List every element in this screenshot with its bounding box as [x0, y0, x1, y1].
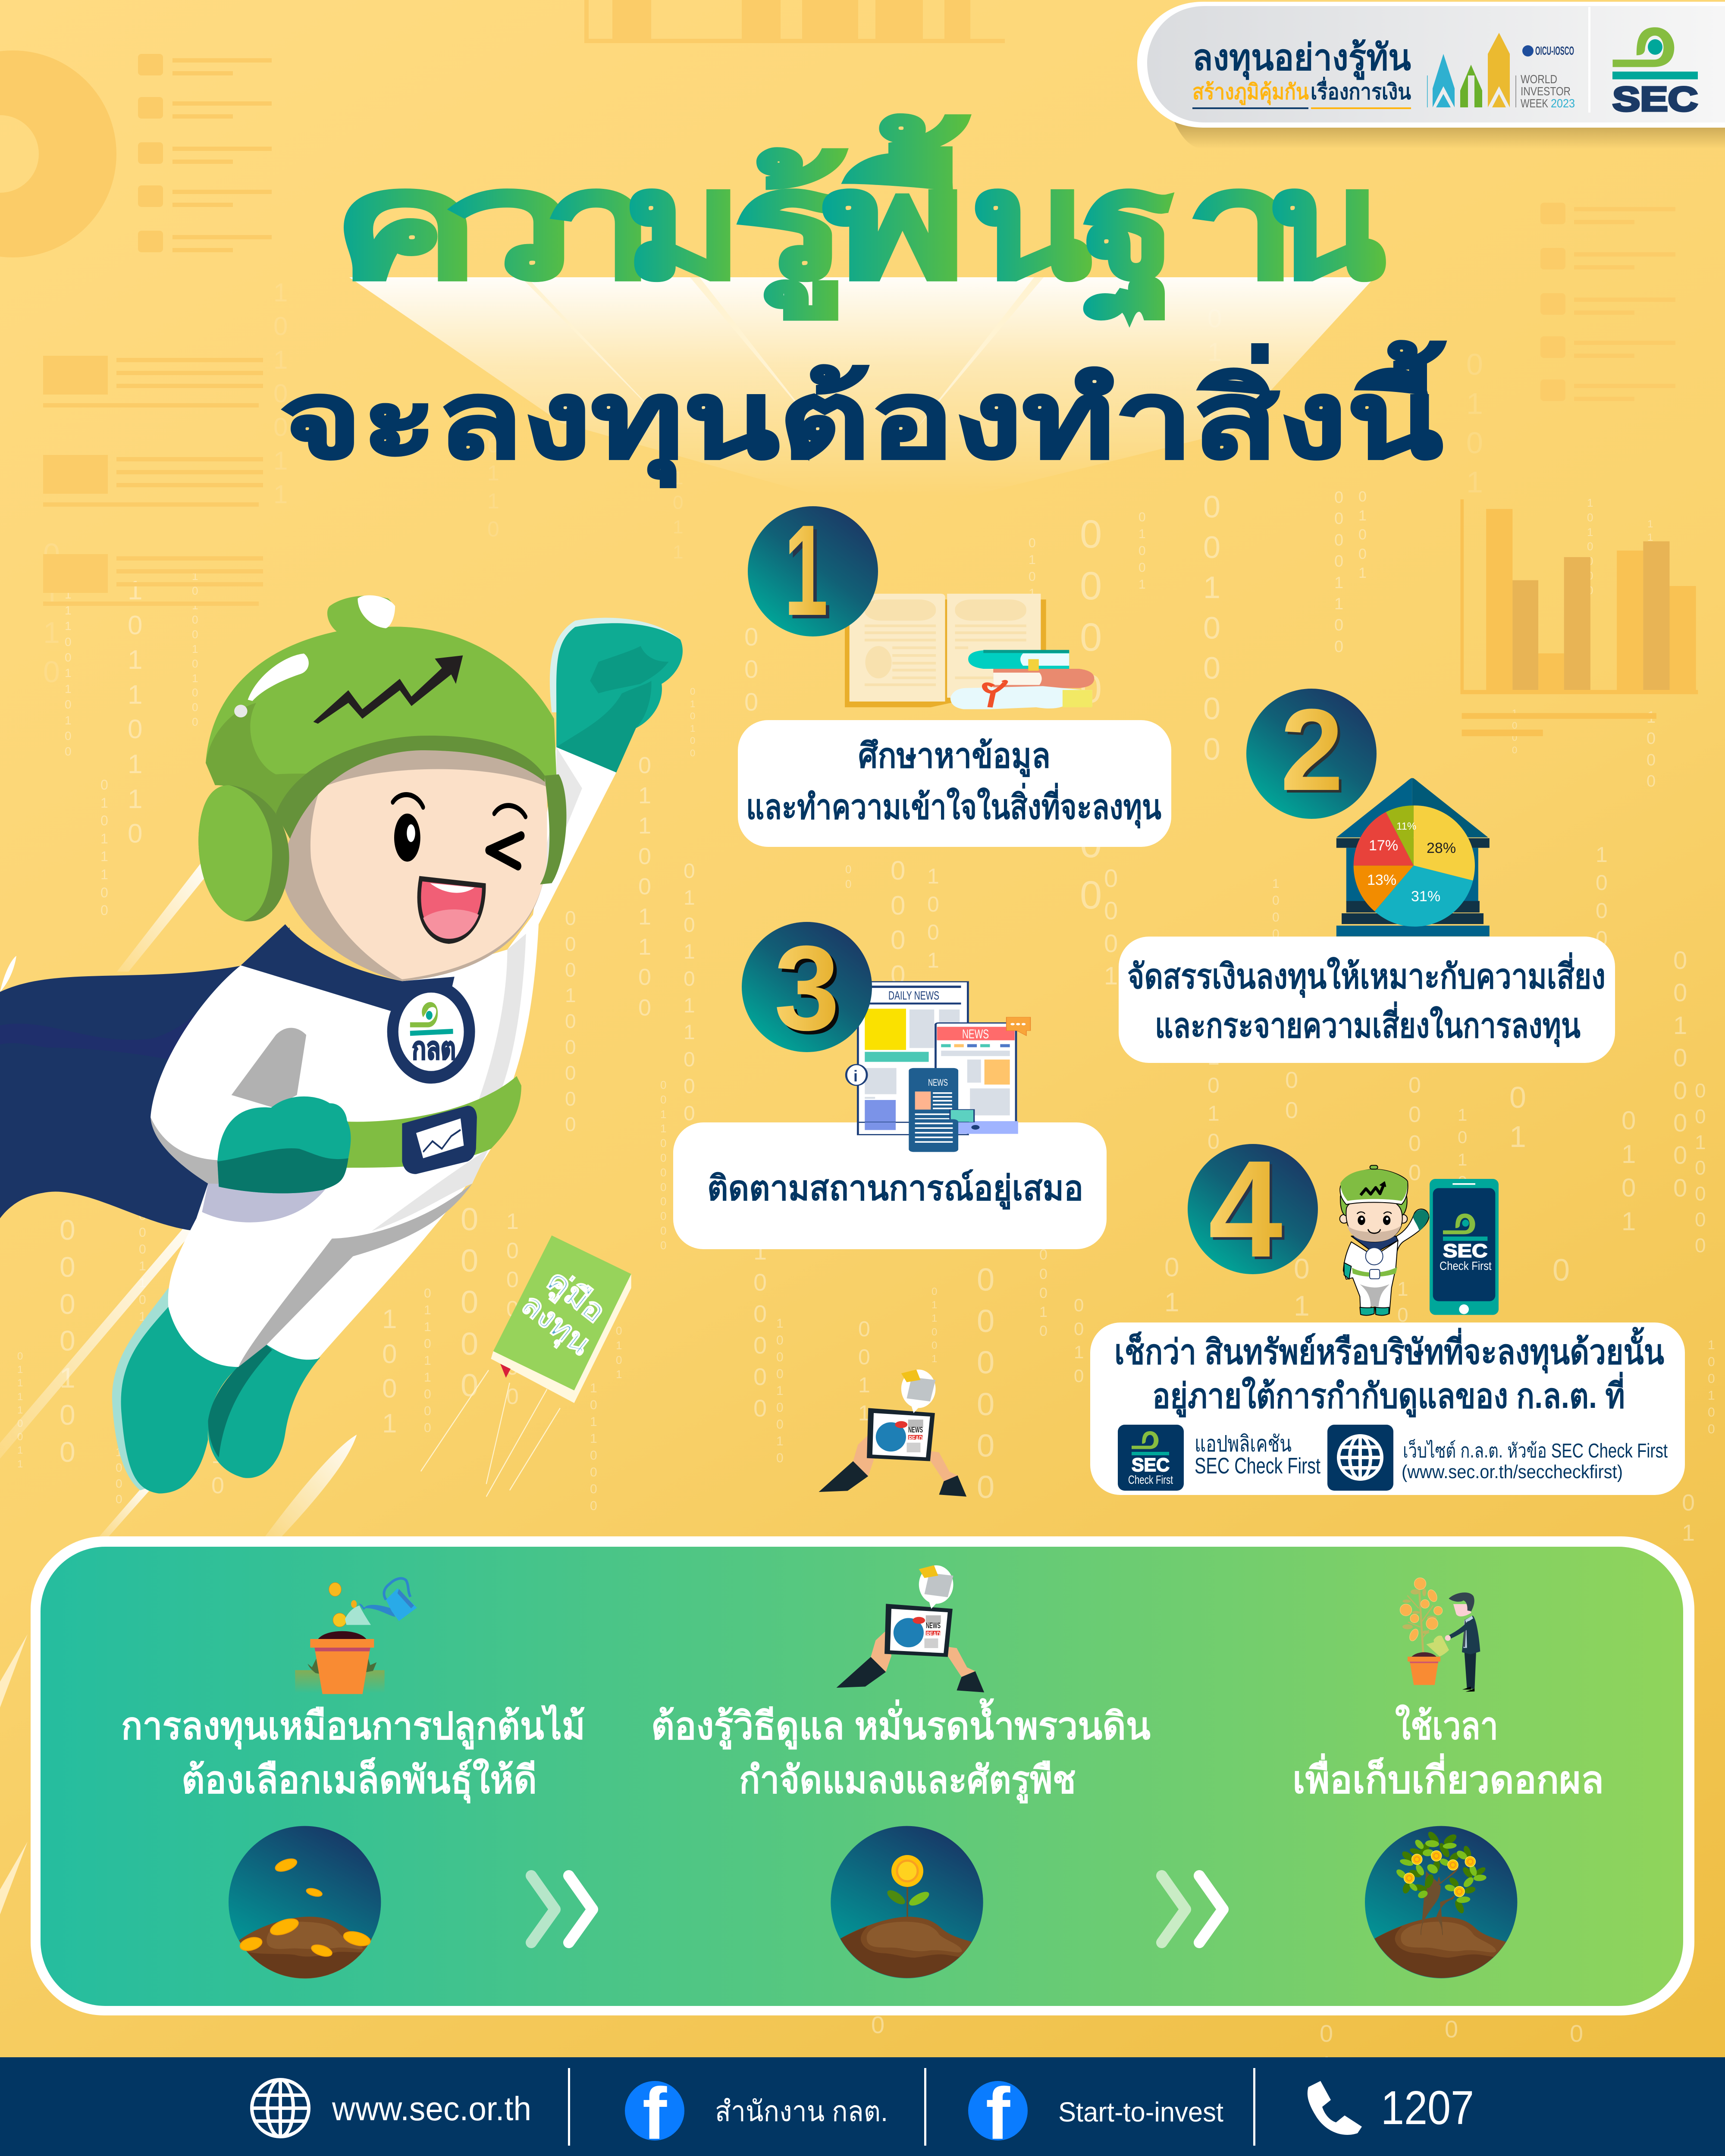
icon: tablet with hands: READ [926, 1631, 940, 1638]
mini mascot [1340, 1166, 1429, 1315]
chest badge [387, 980, 475, 1084]
manual book icon: คู่มือ [539, 1263, 612, 1332]
step 1 card: และทำความเข้าใจในสิ่งที่จะลงทุน [746, 783, 1161, 829]
footer bar: 1207 [1381, 2081, 1474, 2134]
text: 010100 [690, 686, 695, 758]
text: 01001 [1138, 510, 1146, 592]
text: 0110 [43, 537, 60, 689]
footer bar: www.sec.or.th [332, 2090, 531, 2128]
title light rays [349, 277, 1375, 496]
subtitle: จะลงทุนต้องทำสิ่งนี้: จะลงทุนต้องทำสิ่งนี้ [280, 341, 1446, 487]
step 2 card [1119, 937, 1615, 1063]
step 2 illustration: allocation pie: 17% [1369, 837, 1398, 854]
text: 0101 [616, 1324, 622, 1381]
step 2 illustration: allocation pie: 11% [1396, 821, 1416, 832]
step 2 illustration: allocation pie [1336, 778, 1490, 937]
text: 01 [1509, 1081, 1526, 1153]
suit body [151, 744, 616, 1367]
arrow 1 [531, 1876, 593, 1943]
step 4 card: SEC Check First [1195, 1454, 1320, 1479]
step 2 badge: 2 [1280, 685, 1343, 815]
app icon [1118, 1425, 1184, 1491]
text: 1010000 [1587, 496, 1593, 597]
circle: sprouting coin [831, 1826, 983, 1978]
belt with buckle [344, 1076, 521, 1174]
title: ความรู้พื้นฐาน: รู้ [733, 141, 849, 320]
text: 10110000 [590, 1381, 597, 1513]
text: 0110 [487, 433, 499, 541]
text: 0110010 [783, 531, 788, 616]
title: ความรู้พื้นฐาน: า [543, 141, 654, 310]
world investor week logo: 2023 [1551, 97, 1575, 110]
campaign heading: ลงทุนอย่างรู้ทัน [1192, 37, 1411, 80]
app icon: SEC [1132, 1454, 1170, 1476]
text: plant the seed: การลงทุนเหมือนการปลูกต้นไม้ [121, 1705, 585, 1750]
header pill [1137, 2, 1725, 149]
text: 00001100 [1334, 489, 1343, 656]
step 2 badge: 2 [1283, 688, 1346, 818]
text: 01001 [1358, 489, 1367, 581]
step 3 illustration: news: i [853, 1067, 858, 1085]
campaign heading: เรื่องการเงิน [1311, 77, 1411, 104]
circle: money tree [1365, 1826, 1517, 1978]
text: care for the plant [651, 1698, 1151, 1804]
world investor week logo: OICU-IOSCO [1535, 44, 1574, 57]
text: 0 [1552, 1253, 1570, 1288]
text: 000 [744, 623, 758, 716]
text: 10 [1397, 1278, 1408, 1326]
raised glove [550, 618, 683, 772]
text: 0100 [1208, 304, 1222, 434]
text: 100100 [1708, 1338, 1715, 1436]
text: 0101 [1466, 348, 1483, 499]
text: 100001 [1272, 877, 1280, 975]
helmet [198, 595, 566, 921]
icon: facebook 1 [625, 2073, 684, 2155]
title: ความรู้พื้นฐาน: ค [332, 141, 480, 310]
step 3 badge [742, 921, 872, 1059]
step 3 illustration: news: NEWS [962, 1027, 989, 1041]
text: 001100000000 [660, 1078, 666, 1252]
tablet with hands: READ [909, 1435, 922, 1442]
text: 0010000 [1203, 490, 1220, 767]
website icon [1327, 1425, 1393, 1491]
icon: globe [252, 2080, 309, 2137]
world investor week logo: WORLD [1521, 72, 1557, 86]
campaign heading [1192, 37, 1411, 109]
phone and newspaper overlap on card 3 [858, 1119, 1018, 1152]
text: plant the seed [121, 1705, 585, 1804]
footer bar: สำนักงาน กลต. [715, 2095, 888, 2127]
step 1 card [738, 720, 1171, 847]
text: 1010011 [273, 278, 288, 509]
gloved fist [217, 1097, 351, 1193]
world investor week logo [1427, 33, 1575, 110]
text: 0000 [1408, 1073, 1421, 1185]
text: care for the plant: ต้องรู้วิธีดูแล หมั่นรดน้ำพรวนดิน [651, 1698, 1151, 1750]
text: 011100110100 [65, 572, 72, 758]
footer bar [0, 2057, 1725, 2156]
text: 0010 [1074, 1295, 1084, 1386]
step 1 card: ศึกษาหาข้อมูล [858, 736, 1051, 777]
text: 0001101 [139, 1209, 146, 1324]
title: ความรู้พื้นฐาน: ม [624, 141, 743, 309]
icon: tablet with hands: NEWS [926, 1621, 941, 1630]
text: plant the seed: ต้องเลือกเมล็ดพันธุ์ให้ดี [182, 1757, 537, 1804]
phone: SEC [1443, 1241, 1487, 1261]
text: 01 [1682, 1490, 1695, 1546]
text: 0010000 [1695, 1079, 1706, 1257]
step 2 illustration: allocation pie: 28% [1427, 840, 1456, 856]
icon: businessman watering money plant [1400, 1578, 1480, 1692]
title: ความรู้พื้นฐาน: ว [445, 141, 576, 310]
text: 011110011 [17, 1351, 23, 1470]
text: 10100101000 [192, 570, 198, 728]
text: 0101 [1164, 1253, 1179, 1387]
text: 00100000 [1673, 946, 1687, 1202]
text: 100 [1285, 1037, 1298, 1123]
text: 00000 [461, 1201, 478, 1403]
step 4 card: อยู่ภายใต้การกำกับดูแลของ ก.ล.ต. ที่ [1152, 1372, 1625, 1418]
step 3 card [673, 1122, 1107, 1249]
text: 1000010 [1039, 1209, 1048, 1339]
text: 011011000 [424, 1286, 431, 1435]
title: ความรู้พื้นฐาน: น [970, 141, 1092, 309]
text: 0000 [891, 856, 905, 990]
text: 100010010 [776, 1316, 784, 1465]
text: care for the plant: กำจัดแมลงและศัตรูพืช [739, 1758, 1076, 1804]
text: 1000 [1512, 708, 1517, 755]
tablet with hands: NEWS [908, 1426, 923, 1434]
text: 0000100 [60, 1214, 75, 1468]
step 4 card: แอปพลิเคชัน [1195, 1432, 1292, 1457]
step 3 illustration: news [846, 982, 1030, 1152]
text: 10100 [1208, 1045, 1220, 1181]
world investor week logo: INVESTOR [1521, 85, 1571, 98]
text: 0 [871, 2011, 884, 2038]
step 1 illustration: books [845, 594, 1094, 709]
background decoration: faint charts [0, 0, 1675, 606]
icon: facebook 2: f [986, 2073, 1010, 2155]
text: 0101 [1622, 1106, 1636, 1236]
title: ความรู้พื้นฐาน: พื้ [823, 115, 971, 309]
step 2 illustration: allocation pie: 13% [1367, 872, 1396, 888]
step 2 illustration: allocation pie: 31% [1411, 888, 1440, 905]
step 1 badge: 1 [784, 498, 828, 642]
text: 1001 [927, 864, 939, 972]
step 4 badge: 4 [1208, 1131, 1283, 1286]
icon: watering pot [295, 1578, 417, 1694]
world investor week logo: WEEK [1521, 97, 1548, 110]
text: 010 [211, 1412, 224, 1498]
text: 000000 [977, 1262, 994, 1505]
text: 01100000 [753, 1175, 767, 1422]
manual book icon [421, 1235, 631, 1497]
step 4 illustration: mini mascot and phone [1340, 1166, 1499, 1315]
text: 10100 [1458, 1106, 1467, 1214]
text: 1100 [1647, 518, 1653, 570]
text: 011001100 [638, 752, 651, 1020]
text: 0101011000 [684, 860, 695, 1125]
step 1 badge: 1 [787, 501, 831, 646]
icon: tablet with hands [837, 1565, 984, 1692]
text: 011001 [932, 1286, 937, 1365]
green process panel [31, 1536, 1694, 2015]
arrow 2 [1162, 1876, 1223, 1943]
text: harvest: ใช้เวลา [1395, 1704, 1498, 1747]
text: 1000 [1596, 843, 1608, 951]
text: 0001 [1104, 865, 1118, 990]
step 4 badge: 4 [1211, 1134, 1286, 1288]
text: 00000000 [1080, 512, 1102, 917]
text on chest badge: กลต [412, 1031, 456, 1066]
manual book icon: ลงทุน [514, 1287, 597, 1363]
step 3 badge: 3 [778, 924, 843, 1059]
text: 1011 [673, 467, 683, 563]
text: 01 [1294, 1253, 1310, 1322]
collar [241, 924, 455, 1011]
text: 00 [845, 863, 851, 890]
step 2 card: และกระจายความเสี่ยงในการลงทุน [1155, 1001, 1581, 1047]
text: 010100 [1029, 536, 1036, 634]
icon: facebook 2 [968, 2073, 1028, 2155]
app icon: Check First [1128, 1473, 1173, 1486]
circle: seeds and coins [229, 1826, 381, 1978]
text: 0 [1445, 2015, 1458, 2043]
body shading [232, 1028, 306, 1108]
title: ความรู้พื้นฐาน [332, 115, 1386, 324]
text: harvest: เพื่อเก็บเกี่ยวดอกผล [1292, 1753, 1604, 1801]
campaign heading: สร้างภูมิคุ้มกัน [1192, 80, 1309, 105]
SEC logo: SEC [1612, 80, 1698, 118]
step 2 card: จัดสรรเงินลงทุนให้เหมาะกับความเสี่ยง [1127, 952, 1606, 998]
title: ความรู้พื้นฐาน: น [1268, 141, 1386, 310]
title: ความรู้พื้นฐาน: า [1186, 141, 1297, 310]
text: 0 [1570, 2020, 1583, 2047]
step 3 illustration: news: NEWS [928, 1077, 948, 1088]
step 3 illustration: news: DAILY NEWS [888, 989, 939, 1002]
face [393, 795, 526, 941]
text: 1000 [1647, 708, 1656, 790]
text: 1001 [382, 1304, 397, 1438]
step 4 card [1090, 1322, 1685, 1495]
icon: facebook 1: f [643, 2073, 667, 2155]
step 3 card: ติดตามสถานการณ์อยู่เสมอ [707, 1169, 1083, 1210]
step 2 badge [1246, 685, 1377, 819]
title: ความรู้พื้นฐาน: ฐ [1082, 141, 1177, 324]
text: 0011 [858, 1317, 870, 1425]
text: 01011100 [100, 777, 108, 918]
head [281, 738, 547, 981]
icon: phone [1308, 2081, 1362, 2135]
phone [1430, 1179, 1499, 1315]
cape [0, 928, 290, 1231]
text: 1000 [116, 1445, 122, 1506]
SEC logo [1612, 27, 1698, 118]
step 3 badge: 3 [774, 921, 840, 1056]
phone: Check First [1440, 1259, 1492, 1272]
mascot: flying investor hero [0, 595, 683, 1494]
text: harvest [1292, 1704, 1604, 1801]
text: 01 [1320, 2020, 1333, 2078]
left boot [112, 1288, 320, 1494]
text: 1000100 [506, 1209, 519, 1409]
step 4 badge [1188, 1131, 1318, 1288]
tablet with hands [819, 1369, 966, 1497]
text: 10110110 [128, 576, 142, 849]
step 4 card: (www.sec.or.th/seccheckfirst) [1402, 1461, 1623, 1482]
speed streaks [0, 863, 357, 1538]
left edge streaks [0, 1634, 28, 1915]
footer bar: Start-to-invest [1058, 2096, 1223, 2128]
bar chart watermark [1460, 499, 1698, 736]
step 1 badge [748, 498, 878, 646]
text: 000100000 [565, 907, 576, 1135]
